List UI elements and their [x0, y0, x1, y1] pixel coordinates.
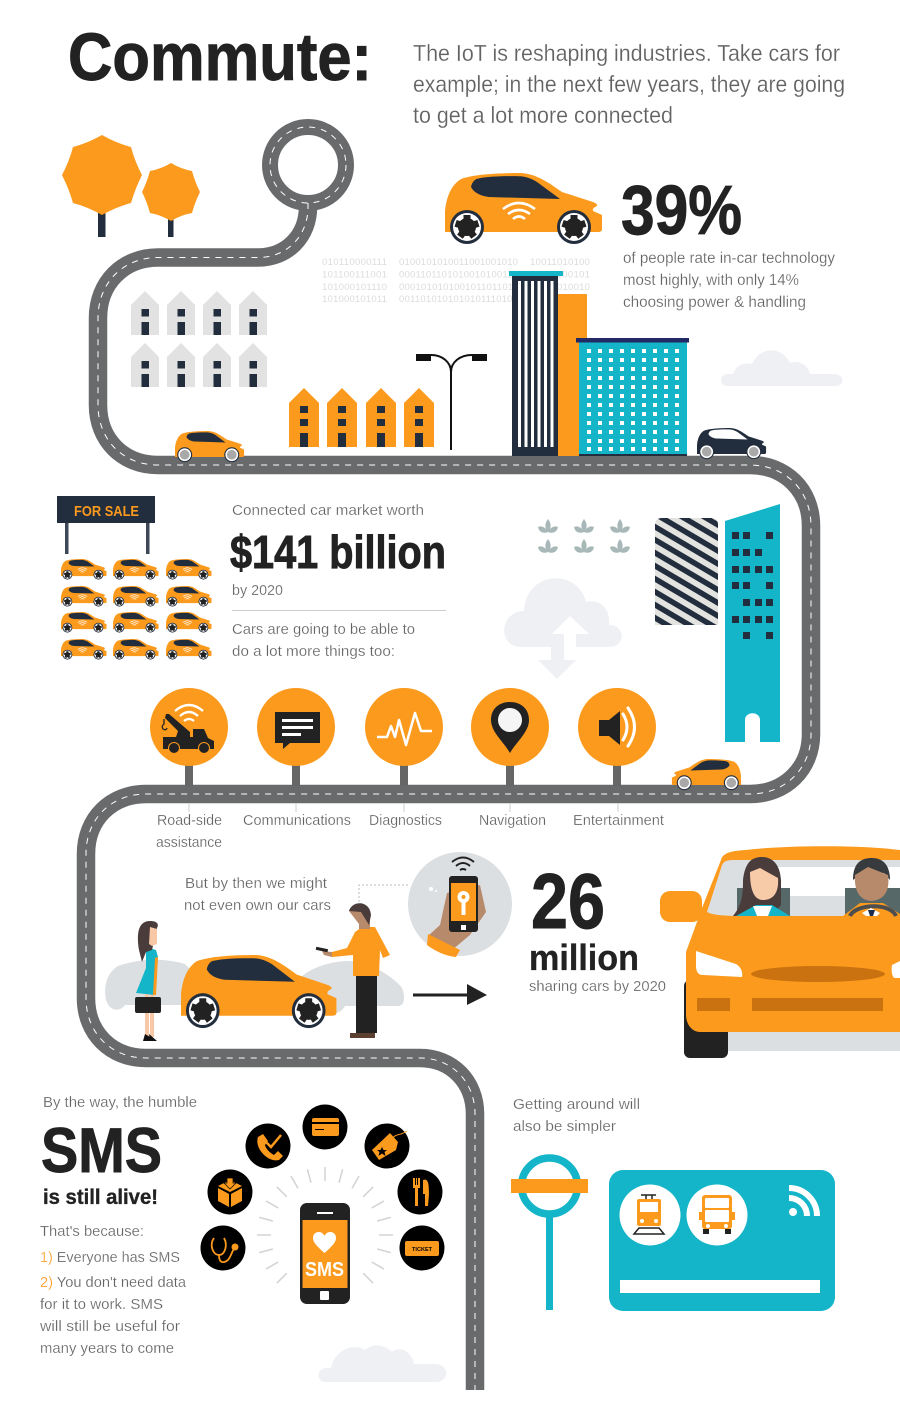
- feature labels: assistance: [156, 835, 222, 851]
- text: getting around: [513, 1096, 640, 1135]
- feature labels: Road-side: [157, 813, 222, 829]
- binary digits: 10011100101: [530, 270, 590, 280]
- icon: sms phone: [300, 1203, 350, 1304]
- stat: $141 billion: Cars are going to be able to: [232, 621, 415, 638]
- icon: bus: [699, 1195, 735, 1234]
- feature labels: [156, 813, 664, 851]
- icon: call check: [246, 1124, 290, 1168]
- text: SMS section: will still be useful for: [39, 1318, 180, 1335]
- icon: diagnostics: [365, 688, 443, 786]
- icon: underground sign: [511, 1158, 588, 1310]
- icon: road-side assistance: [150, 688, 228, 786]
- cloud: upper right: [721, 350, 842, 386]
- grey houses: [131, 291, 267, 387]
- binary digits: 0001101101010010100110: [399, 270, 518, 280]
- icon: tag: [364, 1124, 410, 1168]
- icon: tram: [634, 1195, 664, 1234]
- stat: 39%: 39%: [621, 171, 742, 249]
- binary digits: [322, 257, 590, 305]
- text: SMS section: 1) Everyone has SMS: [40, 1249, 180, 1266]
- intro text: to get a lot more connected: [413, 102, 673, 128]
- car: front view with passengers: [660, 846, 900, 1058]
- text: SMS section: [39, 1094, 197, 1357]
- icon: stethoscope: [200, 1226, 246, 1270]
- cloud with arrows: [504, 578, 622, 679]
- for sale sign: FOR SALE: [74, 503, 139, 520]
- intro text: [413, 40, 845, 128]
- stat: $141 billion: Connected car market worth: [232, 502, 424, 519]
- intro text: The IoT is reshaping industries. Take cars for: [413, 40, 840, 66]
- binary digits: 101000101110: [322, 282, 387, 293]
- cloud: bottom: [318, 1346, 446, 1382]
- car: sharing: [181, 955, 336, 1028]
- stat: 39%: [621, 171, 835, 311]
- icon: box: [208, 1170, 252, 1214]
- car: on road right facing left: [672, 759, 741, 790]
- text: SMS section: By the way, the humble: [43, 1094, 197, 1111]
- feature ticks: [189, 803, 618, 812]
- feature labels: Entertainment: [573, 813, 664, 829]
- feature labels: Communications: [243, 813, 351, 829]
- text: own our cars: But by then we might: [185, 875, 328, 892]
- street lamp: [416, 354, 487, 450]
- icon: communications: [257, 688, 335, 786]
- icon: entertainment: [578, 688, 656, 786]
- stat: 26 million: 26: [531, 857, 605, 945]
- binary digits: 0011010101010101110101: [399, 294, 518, 305]
- striped building: [655, 518, 718, 625]
- feature labels: Diagnostics: [369, 813, 442, 829]
- city buildings: [509, 271, 689, 456]
- for sale sign: [57, 496, 155, 554]
- feature labels: Navigation: [479, 813, 546, 829]
- stat: 39%: of people rate in-car technology: [623, 250, 835, 267]
- icon: phone key in hand: [408, 852, 512, 957]
- text: getting around: also be simpler: [513, 1118, 616, 1135]
- stat: $141 billion: do a lot more things too:: [232, 643, 395, 660]
- text: getting around: Getting around will: [513, 1096, 640, 1113]
- person: man: [316, 903, 390, 1038]
- travel card: [609, 1170, 835, 1311]
- icon: cutlery: [398, 1170, 442, 1214]
- road: [86, 127, 811, 1390]
- sms rays: [257, 1167, 393, 1283]
- car: connected orange: [445, 173, 602, 244]
- binary digits: 0001010101001011011011: [399, 282, 518, 293]
- binary digits: 10011010010: [530, 282, 590, 293]
- icon: ticket: [400, 1226, 444, 1270]
- icon: ticket: TICKET: [412, 1247, 433, 1253]
- text: SMS section: 2) You don't need data: [40, 1274, 187, 1291]
- dotted connector: [359, 885, 408, 902]
- grey cars behind: [105, 960, 404, 1014]
- stat: $141 billion: [230, 502, 446, 660]
- icon: sms phone: SMS: [305, 1259, 344, 1281]
- car: dark on road: [697, 428, 766, 459]
- binary digits: 0100101010011001001010: [399, 257, 518, 268]
- text: SMS section: That's because:: [40, 1223, 144, 1240]
- icon: credit card: [302, 1104, 348, 1150]
- stat: $141 billion: $141 billion: [230, 526, 446, 578]
- stat: 26 million: [529, 857, 666, 995]
- car: on road left: [175, 431, 244, 462]
- text: own our cars: [184, 875, 331, 914]
- title: Commute:: [68, 20, 372, 95]
- text: SMS section: is still alive!: [43, 1186, 158, 1209]
- intro text: example; in the next few years, they are going: [413, 71, 845, 97]
- text: SMS section: SMS: [41, 1116, 162, 1186]
- stat: 39%: choosing power & handling: [623, 294, 806, 311]
- icon: trees: [62, 135, 200, 237]
- orange houses: [289, 388, 434, 447]
- teal tower: [725, 504, 780, 742]
- arrow: [413, 984, 487, 1005]
- icon: contactless: [789, 1188, 817, 1216]
- car grid: [61, 559, 212, 660]
- plants: [538, 519, 630, 553]
- stat: 39%: most highly, with only 14%: [623, 272, 799, 289]
- stat: $141 billion: by 2020: [232, 582, 283, 599]
- text: own our cars: not even own our cars: [184, 897, 331, 914]
- person: woman: [135, 921, 161, 1041]
- binary digits: 101000101011: [322, 294, 387, 305]
- icon: navigation: [471, 688, 549, 786]
- binary digits: 101100111001: [322, 270, 387, 280]
- binary digits: 10011010100: [530, 257, 590, 268]
- stat: 26 million: sharing cars by 2020: [529, 978, 666, 995]
- text: SMS section: many years to come: [40, 1340, 174, 1357]
- binary digits: 010110000111: [322, 257, 387, 268]
- text: SMS section: for it to work. SMS: [40, 1296, 163, 1313]
- stat: 26 million: million: [529, 937, 639, 978]
